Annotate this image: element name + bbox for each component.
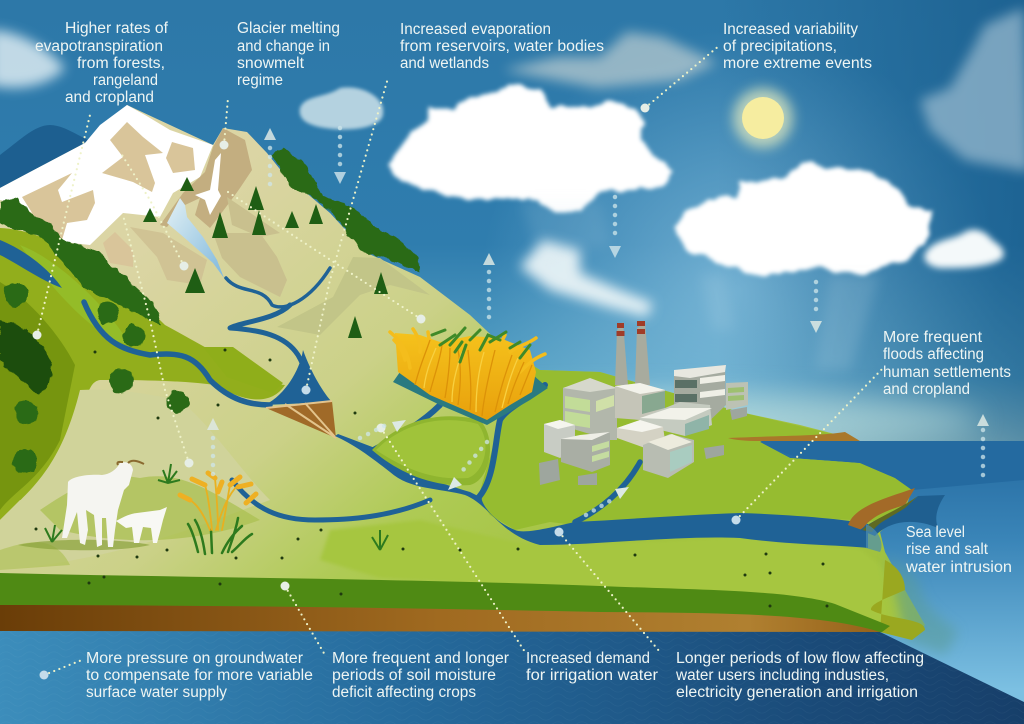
text: floods: and cropland	[883, 381, 970, 398]
beach north	[728, 432, 860, 441]
text: groundwater	[86, 650, 313, 701]
back mountain	[0, 125, 100, 200]
kid	[116, 507, 167, 543]
sky background	[0, 0, 1024, 446]
text: sea level: Sea level	[906, 524, 965, 541]
river mouth	[866, 524, 881, 552]
text: low flow: Longer periods of low flow affecting	[676, 650, 924, 667]
text: irrigation	[526, 650, 658, 684]
cape beach	[848, 488, 915, 530]
goat horns	[117, 461, 144, 465]
cloud: grey top centre	[503, 32, 717, 88]
soil cross-section	[0, 573, 890, 632]
land mass	[0, 105, 925, 640]
small sheds	[539, 407, 747, 485]
dam	[266, 401, 336, 438]
goat shadow	[18, 540, 150, 550]
text: precipitation	[723, 21, 872, 72]
seed dots	[34, 348, 828, 608]
pine trees	[143, 177, 388, 338]
text: groundwater: More pressure on groundwater	[86, 650, 303, 667]
text: sea level: water intrusion	[905, 559, 1012, 576]
cloud: top left	[0, 30, 65, 88]
building: front right	[643, 434, 694, 478]
power plant	[539, 321, 748, 485]
pale patch	[277, 257, 430, 335]
text: floods	[883, 329, 1011, 398]
cloud: small pale	[300, 87, 383, 129]
text: floods: More frequent	[883, 329, 983, 346]
glacier streak	[195, 153, 221, 215]
text: evapotranspiration	[35, 20, 169, 106]
river: west branch	[84, 302, 270, 405]
building: rear right tower	[674, 365, 748, 430]
cloud: top right	[920, 8, 1024, 172]
text: precipitation: more extreme events	[723, 55, 872, 72]
building: centre	[615, 383, 665, 420]
building: long wing	[640, 402, 712, 436]
wheat field	[390, 328, 548, 425]
text: evapotranspiration: Higher rates of	[65, 20, 169, 37]
shore shallows	[888, 555, 958, 655]
text: glacier: and change in	[237, 38, 330, 55]
text: glacier	[237, 20, 340, 89]
text: evapotranspiration: rangeland	[93, 72, 158, 89]
south plain	[320, 520, 905, 628]
text: sea level: rise and salt	[906, 541, 989, 558]
sea	[740, 441, 1024, 724]
text: irrigation: for irrigation water	[526, 667, 658, 684]
bottom panel	[0, 631, 1024, 724]
building: centre low	[617, 420, 665, 448]
text: glacier: regime	[237, 72, 283, 89]
cloud: small right	[924, 230, 1004, 268]
goat	[62, 462, 133, 547]
text: low flow: water users including industies,	[675, 667, 889, 684]
text: low flow: electricity generation and irrigation	[676, 684, 918, 701]
lower-left meadow	[0, 390, 270, 570]
text: evaporation: Increased evaporation	[400, 21, 551, 38]
text: groundwater: to compensate for more variable	[86, 667, 313, 684]
snow cap	[0, 105, 213, 245]
text: evaporation	[400, 21, 604, 72]
north bay	[760, 441, 1024, 490]
text: groundwater: surface water supply	[86, 684, 227, 701]
lower rivers	[232, 385, 868, 548]
cloud: large centre	[387, 83, 675, 212]
text: evaporation: and wetlands	[400, 55, 489, 72]
grass and reeds	[45, 464, 388, 554]
text: soil moisture: periods of soil moisture	[332, 667, 496, 684]
text: soil moisture: deficit affecting crops	[332, 684, 476, 701]
cloud: large right	[673, 162, 932, 275]
clouds	[0, 8, 1024, 370]
text: evapotranspiration: and cropland	[65, 89, 154, 106]
text: low flow	[675, 650, 924, 701]
text: glacier: Glacier melting	[237, 20, 340, 37]
flow arrows	[207, 128, 989, 515]
text: soil moisture	[332, 650, 509, 701]
text: evapotranspiration: from forests,	[77, 55, 165, 72]
rain under clouds	[520, 200, 610, 260]
east green plain	[478, 348, 912, 530]
text: evaporation: from reservoirs, water bodies	[400, 38, 604, 55]
left green hillside	[0, 228, 285, 520]
text: precipitation: Increased variability	[723, 21, 858, 38]
text: precipitation: of precipitations,	[723, 38, 837, 55]
goats	[18, 461, 167, 550]
building: main left	[563, 378, 617, 440]
chimneys	[615, 321, 650, 385]
cloud: smoke	[520, 240, 653, 317]
callout lines and dots	[32, 45, 885, 680]
text: floods: human settlements	[883, 364, 1011, 381]
upper rivers	[226, 268, 332, 405]
text: sea level	[905, 524, 1012, 576]
rock patches	[22, 122, 287, 297]
text: evapotranspiration: evapotranspiration	[35, 38, 163, 55]
building: front left block	[544, 420, 610, 472]
text: soil moisture: More frequent and longer	[332, 650, 509, 667]
sun	[733, 88, 793, 148]
text: irrigation: Increased demand	[526, 650, 650, 667]
bushes	[4, 282, 189, 473]
text: floods: floods affecting	[883, 346, 984, 363]
ridge forests	[0, 148, 420, 395]
glacier lake	[167, 198, 224, 278]
text: glacier: snowmelt	[237, 55, 305, 72]
